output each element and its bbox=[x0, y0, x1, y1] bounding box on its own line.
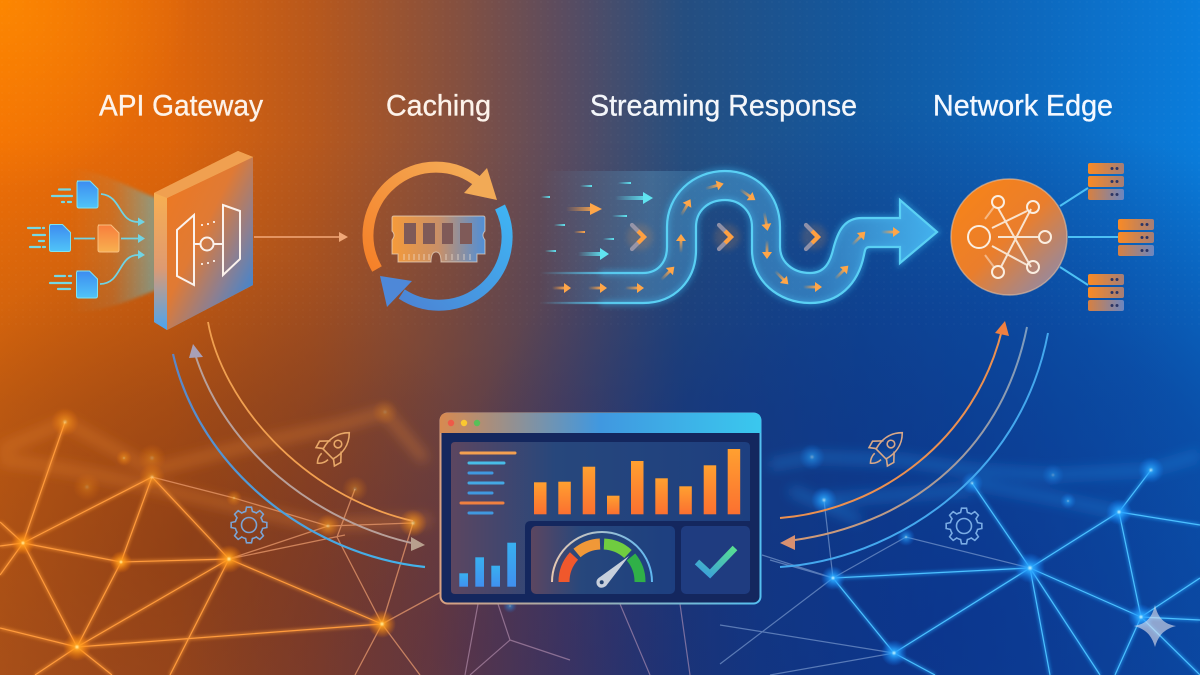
text lines bbox=[461, 453, 515, 513]
dashboard window bbox=[440, 413, 761, 604]
blue network mesh, right bbox=[720, 444, 1200, 675]
check panel bbox=[681, 526, 750, 594]
chevrons bbox=[627, 224, 827, 250]
flow arrows in channel bbox=[552, 179, 900, 293]
icon: request documents bbox=[28, 181, 119, 298]
feedback arrows, left bbox=[173, 322, 425, 567]
edge hub circle bbox=[951, 179, 1067, 295]
caching icon bbox=[368, 167, 507, 307]
window frame bbox=[440, 414, 760, 604]
heading: Caching: Caching bbox=[386, 90, 491, 122]
feedback arrows, right bbox=[780, 321, 1048, 567]
curved channel bbox=[540, 171, 937, 303]
API gateway illustration bbox=[28, 151, 253, 330]
refresh ring bbox=[368, 167, 507, 305]
bar chart: blue bbox=[459, 543, 516, 587]
light wedge into gateway bbox=[70, 168, 156, 312]
title bar bbox=[440, 413, 761, 433]
gauge panel bbox=[531, 526, 675, 594]
icon: node graph bbox=[968, 196, 1051, 278]
icon: check mark bbox=[697, 548, 735, 574]
mesh lines below dashboard bbox=[465, 599, 690, 675]
streaming response path bbox=[540, 171, 937, 303]
gateway panel bbox=[154, 151, 253, 330]
faded intake area bbox=[540, 171, 725, 273]
network edge illustration bbox=[951, 163, 1154, 311]
heading: Streaming Response: Streaming Response bbox=[590, 90, 857, 122]
icon: rocket, left bbox=[308, 422, 360, 474]
arrow: gateway to caching bbox=[254, 232, 348, 242]
icon: RAM module bbox=[392, 216, 485, 262]
heading: API Gateway: API Gateway bbox=[99, 90, 263, 122]
icon: rocket, right bbox=[861, 422, 913, 474]
icon: gear, right bbox=[946, 508, 982, 544]
bar chart: orange bbox=[534, 449, 740, 514]
incoming streaks bbox=[541, 182, 653, 260]
top chart panel bbox=[451, 442, 750, 594]
icon: server stacks bbox=[1088, 163, 1154, 311]
path glow bbox=[600, 171, 937, 303]
icon: gear, left bbox=[231, 507, 267, 543]
heading: Network Edge: Network Edge bbox=[933, 90, 1113, 122]
icon: gateway symbol bbox=[177, 205, 240, 285]
icon: sparkle watermark bbox=[1134, 605, 1176, 647]
orange network mesh, left bbox=[0, 399, 441, 675]
connector arrows bbox=[74, 194, 145, 284]
server connectors bbox=[1060, 188, 1118, 285]
gauge needle bbox=[596, 556, 629, 588]
